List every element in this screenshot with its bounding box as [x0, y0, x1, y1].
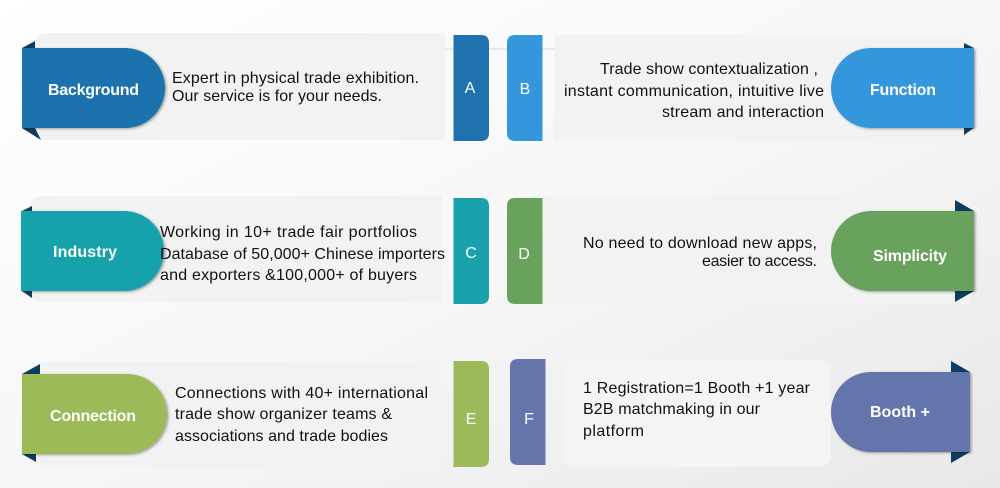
- text: Background: Our service is for your needs.: [172, 88, 382, 105]
- panel: Function: [554, 35, 974, 141]
- tile: E: [454, 361, 489, 467]
- panel: Background: [22, 33, 445, 140]
- tab: Connection: [22, 374, 167, 454]
- tab: Background: [22, 48, 165, 128]
- text: Connection: trade show organizer teams &: [175, 406, 392, 423]
- tab: Function: Function: [870, 82, 936, 99]
- tab: Background: Background: [48, 82, 139, 99]
- ribbon fold: Industry: [22, 206, 32, 298]
- text: Industry: Database of 50,000+ Chinese importers: [160, 246, 445, 263]
- ribbon fold: Connection: [22, 364, 40, 462]
- tab: Booth +: [831, 372, 970, 452]
- tile: A: A: [465, 80, 476, 97]
- text: Industry: Working in 10+ trade fair portfolios: [160, 224, 417, 241]
- tile: B: [507, 35, 542, 141]
- panel: Simplicity: [543, 196, 974, 304]
- tile: C: C: [465, 245, 477, 262]
- text: Function: stream and interaction: [662, 104, 824, 121]
- ribbon fold: Simplicity: [955, 200, 974, 302]
- text: Connection: Connections with 40+ international: [175, 385, 428, 402]
- tile: B: B: [520, 81, 530, 98]
- text: Simplicity: No need to download new apps,: [583, 235, 817, 252]
- text: Function: Trade show contextualization ,: [600, 61, 818, 78]
- tab: Function: [831, 48, 974, 128]
- tab: Simplicity: Simplicity: [873, 248, 947, 265]
- text: Function: instant communication, intuitive live: [564, 83, 824, 100]
- tile: F: [510, 359, 546, 465]
- tab: Simplicity: [831, 211, 974, 291]
- panel: Connection: [22, 362, 440, 468]
- text: Connection: associations and trade bodies: [175, 428, 388, 445]
- tile: F: F: [524, 411, 534, 428]
- tab: Industry: Industry: [53, 244, 117, 261]
- tile: A: [454, 35, 489, 141]
- tile: E: E: [466, 411, 476, 428]
- text: Simplicity: easier to access.: [702, 253, 817, 270]
- tab: Booth +: Booth +: [870, 404, 930, 421]
- tile: D: [507, 198, 542, 304]
- tile: C: [454, 198, 489, 304]
- text: Booth +: 1 Registration=1 Booth +1 year: [583, 380, 811, 397]
- text: Booth +: platform: [583, 423, 644, 440]
- tile: D: D: [518, 246, 530, 263]
- tab: Connection: Connection: [50, 408, 136, 425]
- ribbon fold: Function: [964, 43, 974, 135]
- ribbon fold: Booth +: [951, 361, 970, 463]
- panel: Industry: [21, 196, 445, 302]
- text: Industry: and exporters &100,000+ of buyers: [160, 267, 417, 284]
- panel: Booth +: [563, 360, 970, 467]
- tab: Industry: [21, 211, 164, 291]
- text: Background: Expert in physical trade exhibition.: [172, 70, 419, 87]
- text: Booth +: B2B matchmaking in our: [583, 401, 761, 418]
- ribbon fold: Background: [22, 41, 41, 140]
